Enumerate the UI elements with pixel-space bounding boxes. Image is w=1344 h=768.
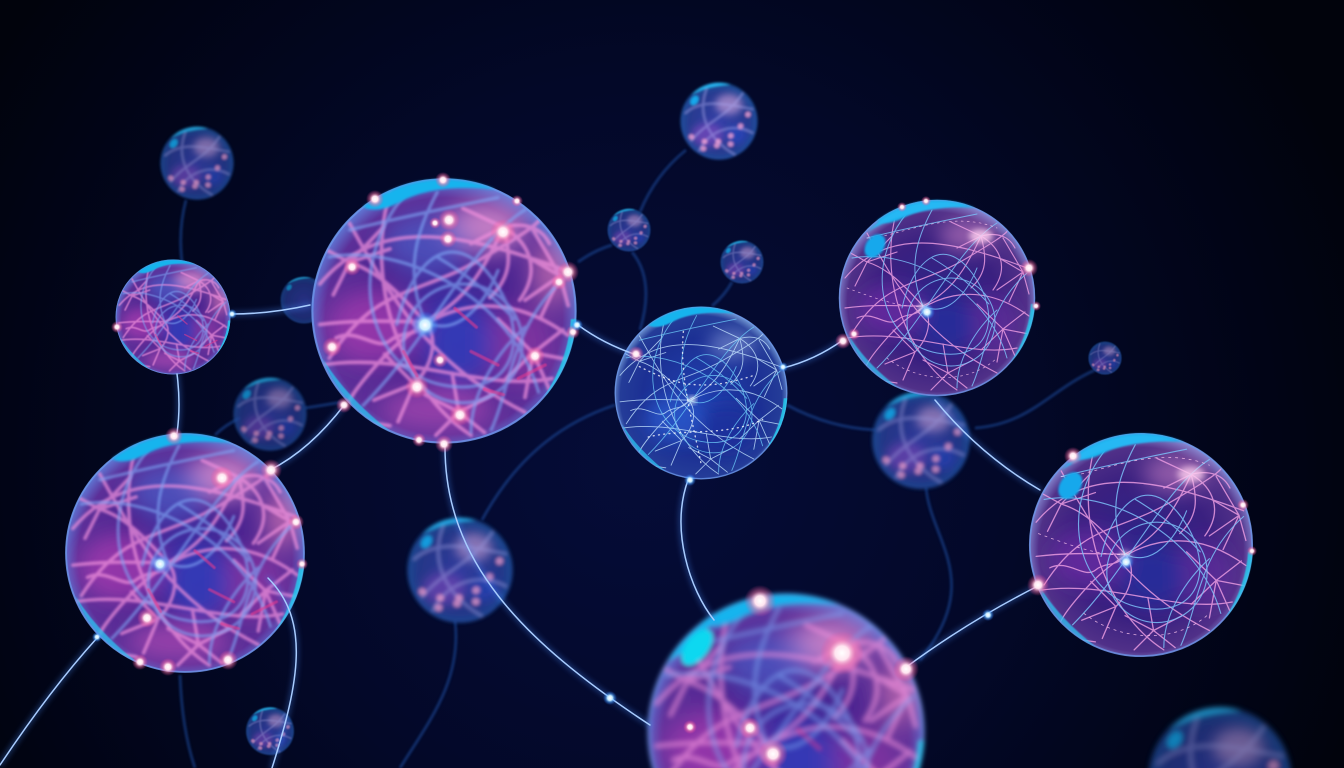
small sphere: right of centre upper [720,240,764,284]
large sphere: lower left [65,433,305,673]
small sphere: top centre [680,82,758,160]
medium sphere: below centre right [872,391,970,489]
large sphere: upper left [312,179,576,443]
pink glowing nodes [111,172,1257,768]
small sphere: left middle [233,377,307,451]
large sphere: upper right [839,200,1035,396]
sphere: left small bright [116,260,230,374]
dim background fibres [180,150,1095,768]
blue sphere: centre [615,307,787,479]
small sphere: far right [1088,341,1122,375]
large sphere: lower right [1029,433,1253,657]
medium sphere: lower centre [407,517,513,623]
blue glowing nodes [92,304,1134,705]
small sphere: top left [160,126,234,200]
small sphere: centre upper [607,208,651,252]
partial sphere: bottom right [1148,706,1292,768]
small sphere: bottom left [246,707,294,755]
large sphere: bottom centre [648,594,924,768]
small sphere: behind large sphere [280,276,328,324]
bright connecting fibres [0,305,1040,768]
